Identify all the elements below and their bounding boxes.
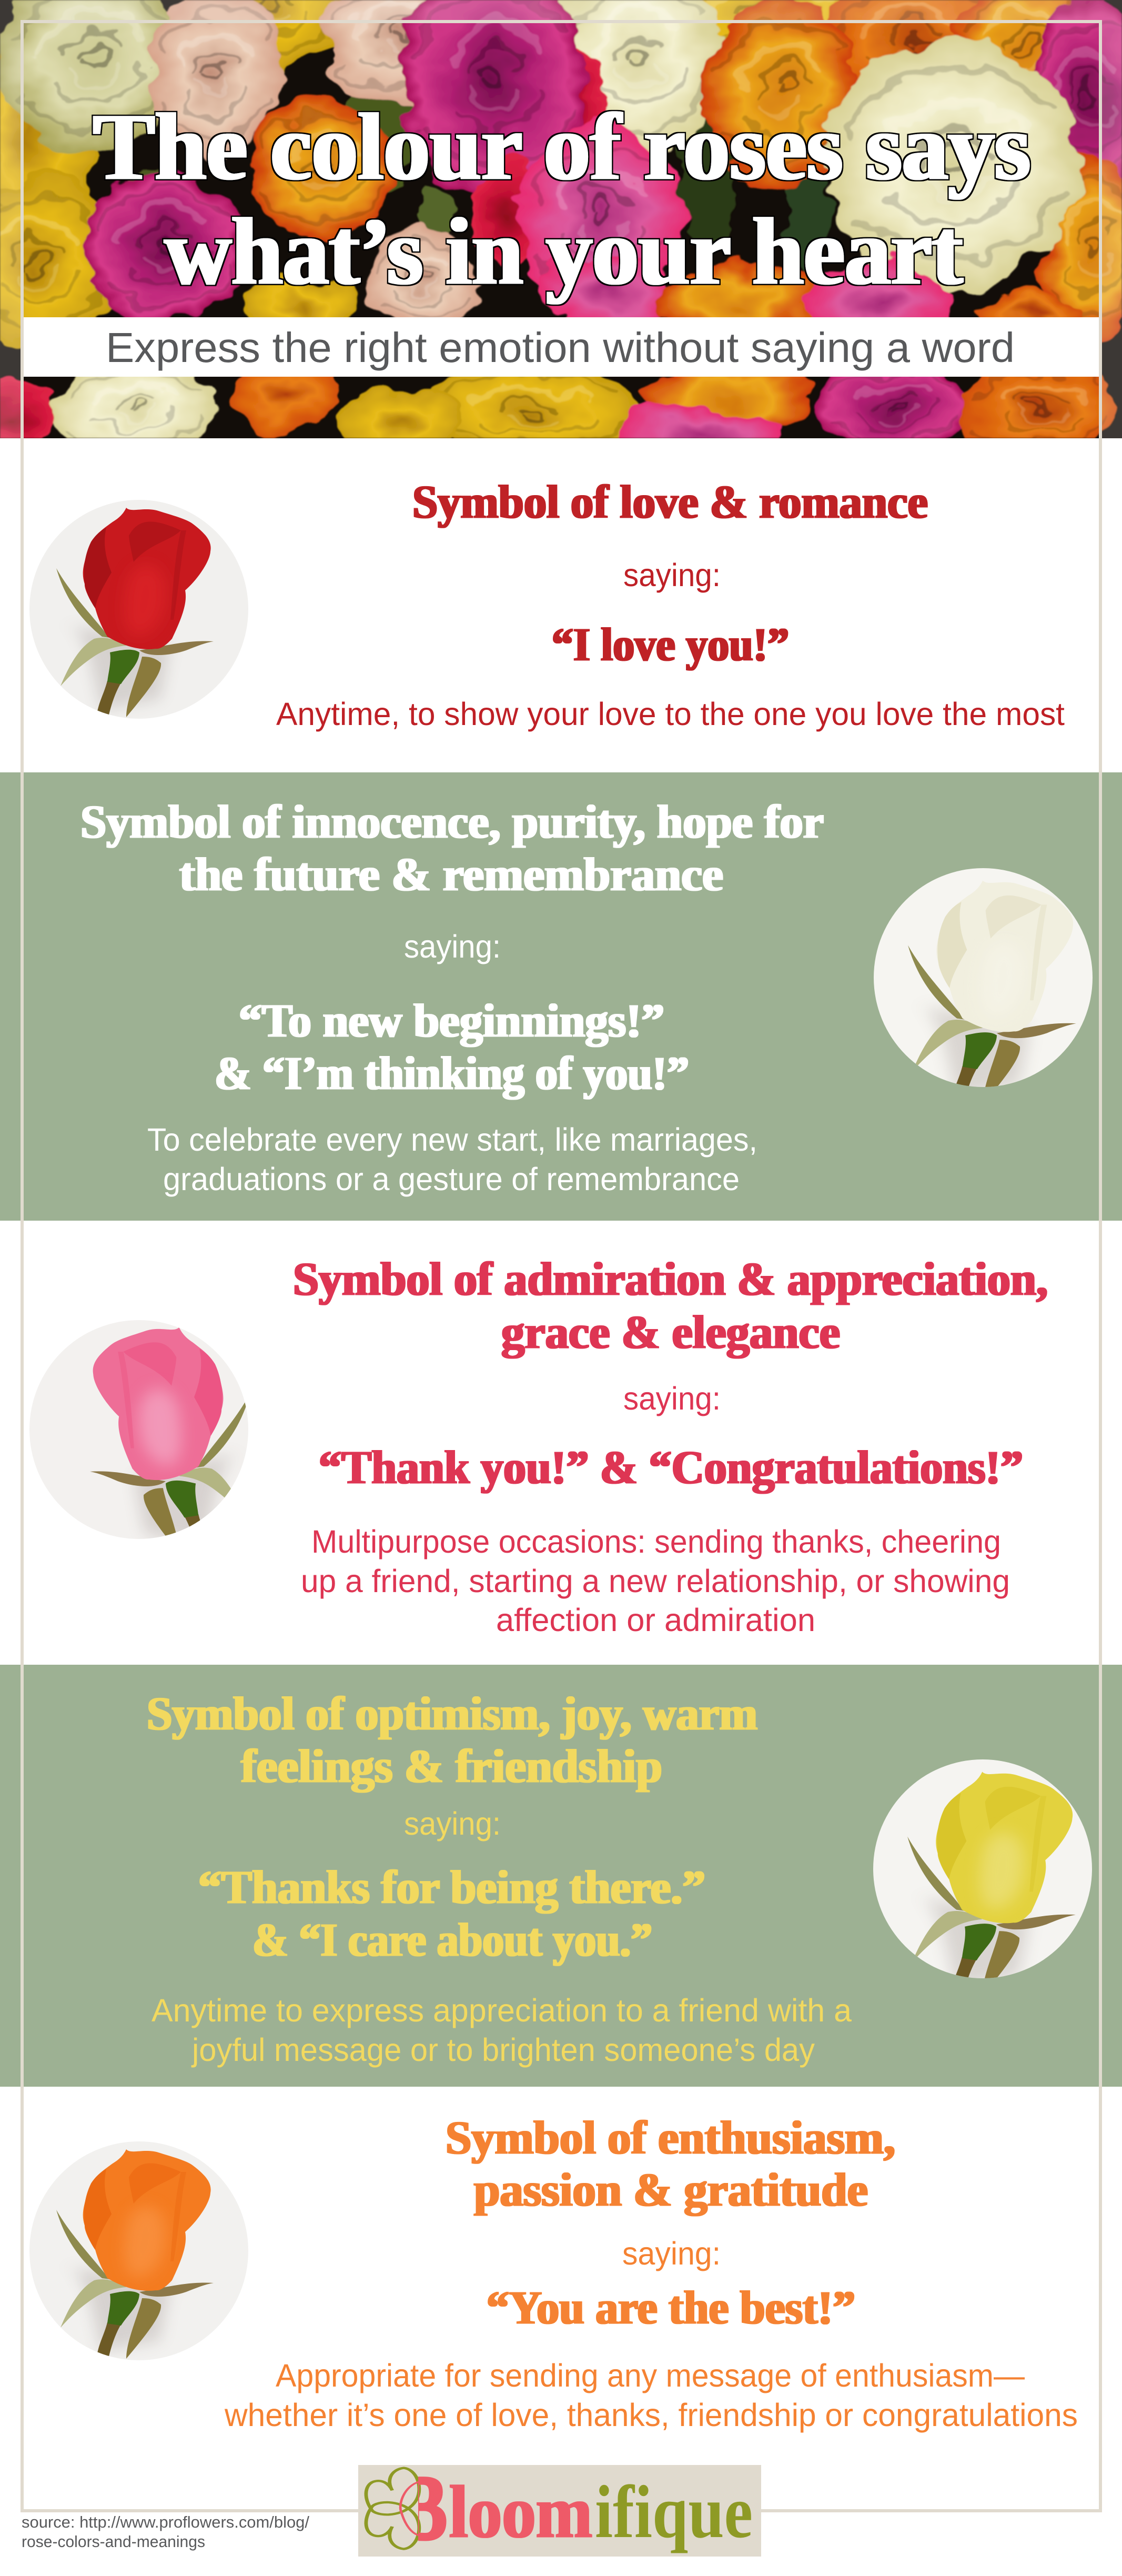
white heading: [80, 796, 824, 901]
icon: white rose: [874, 868, 1093, 1104]
source note: source: http://www.proflowers.com/blog/: [22, 2513, 309, 2531]
hero banner: rose photograph: [0, 0, 1122, 463]
panel: red rose: [29, 476, 1065, 732]
red occasion text: Anytime, to show your love to the one you love the most: [276, 696, 1065, 732]
pink quote: “Thank you!” & “Congratulations!”: [319, 1442, 1023, 1494]
yellow occasion text: joyful message or to brighten someone’s day: [191, 2032, 815, 2068]
orange heading: Symbol of enthusiasm,: [446, 2112, 895, 2164]
white quote: “To new beginnings!”: [239, 995, 664, 1047]
yellow saying label: saying:: [404, 1806, 501, 1842]
title: what’s in your heart: [165, 199, 963, 305]
wordmark: [400, 2457, 753, 2560]
orange quote: “You are the best!”: [487, 2282, 855, 2334]
panel: white rose: [80, 796, 1093, 1197]
panel: yellow rose background: [0, 1665, 1122, 2087]
white heading: Symbol of innocence, purity, hope for: [80, 796, 824, 848]
panel: yellow rose: [147, 1688, 1092, 2068]
yellow quote: “Thanks for being there.”: [198, 1861, 705, 1914]
white occasion text: graduations or a gesture of remembrance: [163, 1161, 740, 1197]
pink heading: [293, 1253, 1048, 1359]
white occasion text: To celebrate every new start, like marriages,: [147, 1122, 757, 1158]
icon: flower mark: [366, 2468, 420, 2549]
white occasion text: [147, 1122, 757, 1197]
white quote: & “I’m thinking of you!”: [215, 1048, 689, 1100]
panel: orange rose: [29, 2112, 1078, 2433]
logo: Bloomifique: [358, 2457, 761, 2560]
orange occasion text: whether it’s one of love, thanks, friendship or congratulations: [224, 2397, 1078, 2433]
pink occasion text: affection or admiration: [496, 1602, 815, 1638]
orange heading: passion & gratitude: [474, 2164, 868, 2216]
white quote: [215, 995, 689, 1100]
yellow heading: feelings & friendship: [241, 1740, 662, 1793]
yellow quote: & “I care about you.”: [252, 1914, 652, 1966]
icon: pink rose: [29, 1320, 250, 1553]
icon: red rose: [29, 500, 248, 719]
red saying label: saying:: [623, 557, 721, 593]
orange heading: [446, 2112, 895, 2216]
wordmark: B: [400, 2457, 447, 2560]
icon: orange rose: [29, 2141, 248, 2360]
source note: rose-colors-and-meanings: [22, 2532, 205, 2551]
orange occasion text: Appropriate for sending any message of enthusiasm—: [276, 2358, 1025, 2393]
panel: pink rose: [29, 1253, 1048, 1638]
icon: yellow rose: [873, 1759, 1092, 1996]
subtitle strip: [21, 317, 1101, 377]
yellow quote: [198, 1861, 705, 1966]
wordmark: loom: [449, 2470, 592, 2553]
wordmark: ifique: [595, 2470, 753, 2553]
white saying label: saying:: [404, 929, 501, 964]
yellow occasion text: [151, 1993, 852, 2068]
panel: white rose background: [0, 772, 1122, 1221]
pink saying label: saying:: [623, 1381, 721, 1416]
pink heading: Symbol of admiration & appreciation,: [293, 1253, 1048, 1305]
title: The colour of roses says: [93, 94, 1030, 200]
yellow heading: Symbol of optimism, joy, warm: [147, 1688, 757, 1740]
pink occasion text: up a friend, starting a new relationship, or showing: [301, 1563, 1010, 1599]
subtitle strip: Express the right emotion without saying a word: [106, 324, 1015, 371]
red quote: “I love you!”: [552, 619, 789, 671]
pink occasion text: Multipurpose occasions: sending thanks, cheering: [311, 1524, 1001, 1559]
orange occasion text: [224, 2358, 1078, 2433]
yellow heading: [147, 1688, 757, 1793]
title: [93, 94, 1030, 305]
yellow occasion text: Anytime to express appreciation to a friend with a: [151, 1993, 852, 2028]
pink heading: grace & elegance: [501, 1306, 840, 1359]
pink occasion text: [301, 1524, 1010, 1638]
white heading: the future & remembrance: [179, 849, 723, 901]
source note: [22, 2513, 309, 2551]
red heading: Symbol of love & romance: [412, 476, 928, 528]
orange saying label: saying:: [622, 2236, 721, 2271]
